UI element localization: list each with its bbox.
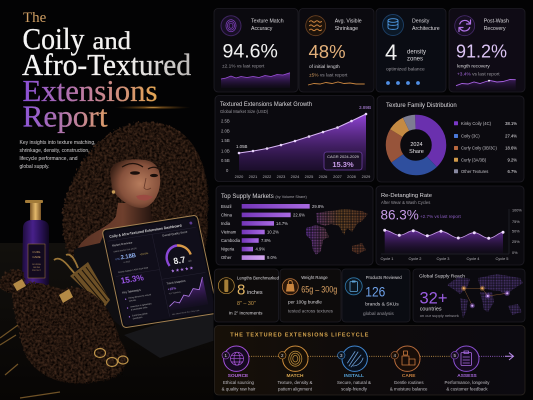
panel: weight range bbox=[280, 269, 341, 322]
panel: re-detangling rate bbox=[376, 186, 524, 265]
step 1: source: Ethical sourcing bbox=[223, 380, 255, 385]
hair bundles bbox=[0, 270, 127, 383]
step 5: assess: ASSESS bbox=[457, 373, 478, 379]
tablet: Coily & Afro-Textured Extensions Dashboard bbox=[109, 224, 182, 239]
tablet: 8.7 bbox=[172, 254, 187, 266]
supply bars: 14.7% bbox=[276, 221, 288, 226]
tablet: distribution bbox=[133, 316, 143, 320]
dotted timeline bbox=[249, 355, 510, 357]
donut legend bbox=[454, 121, 517, 174]
panel: market growth chart: Global Market Size (USD) bbox=[220, 109, 269, 114]
panel: lengths benchmarked bbox=[214, 269, 280, 322]
panel: top supply markets bbox=[216, 186, 373, 265]
CAGR callout: CAGR 2024-2029 bbox=[327, 154, 360, 159]
panel: market growth chart: 1.05B bbox=[236, 144, 248, 149]
panel: global supply reach: on our supply network bbox=[420, 313, 459, 318]
step 3: install: INSTALL bbox=[344, 373, 364, 379]
panel: global supply reach: countries bbox=[420, 306, 442, 312]
intro paragraph: shrinkage, density, construction, bbox=[20, 148, 90, 154]
icon: waves bbox=[306, 16, 326, 36]
supply bars: Cambodia bbox=[221, 238, 241, 243]
cycle labels: Cycle 3 bbox=[437, 256, 449, 261]
intro paragraph bbox=[20, 140, 96, 170]
panel: texture family distribution bbox=[377, 96, 524, 182]
axis labels bbox=[512, 208, 522, 255]
panel: weight range: 65g – 300g bbox=[301, 285, 337, 295]
supply bars: 7.8% bbox=[261, 238, 271, 243]
panel: global supply reach bbox=[413, 269, 525, 322]
panel: density architecture: Architecture bbox=[412, 26, 440, 32]
x axis years: 2029 bbox=[362, 174, 370, 179]
panel: products reviewed bbox=[342, 269, 410, 322]
sparkline bbox=[221, 73, 290, 88]
purple shampoo bottle: PROTECT bbox=[32, 270, 42, 272]
panel: weight range: tested across textures bbox=[288, 308, 334, 313]
keyboard bbox=[124, 314, 214, 358]
step 4: care: & moisture balance bbox=[390, 386, 428, 392]
purple shampoo bottle bbox=[22, 200, 49, 285]
cycle labels bbox=[381, 256, 508, 261]
panel: density architecture: density bbox=[407, 50, 426, 56]
panel: global supply reach: Global Supply Reach bbox=[419, 274, 465, 280]
gold hair rings bbox=[94, 348, 128, 366]
icon: fingerprint bbox=[221, 16, 241, 36]
x axis years bbox=[235, 174, 370, 179]
panel: market growth chart: 3.89B bbox=[359, 105, 371, 110]
donut centre label: Share bbox=[409, 149, 424, 155]
cycle labels: Cycle 4 bbox=[467, 256, 480, 261]
woman's hair bbox=[63, 122, 209, 275]
title: Coily bbox=[22, 22, 85, 56]
panel: re-detangling rate: 86.3% bbox=[380, 208, 419, 223]
supply bars: 4.9% bbox=[256, 246, 265, 252]
panel: re-detangling rate: After Wear & Wash Cycles bbox=[381, 200, 430, 205]
cycle labels: Cycle 1 bbox=[381, 256, 393, 261]
title: Afro-Textured bbox=[22, 48, 191, 82]
panel: products reviewed: brands & SKUs bbox=[365, 302, 399, 308]
donut legend: Curly Coily (3B/3C) bbox=[461, 146, 497, 150]
panel: weight range: Weight Range bbox=[301, 275, 328, 280]
tablet: Key Takeaways bbox=[122, 288, 142, 295]
density dots bbox=[386, 81, 420, 85]
step 5: assess: 5 bbox=[453, 353, 456, 358]
tablet: +18% bbox=[167, 286, 177, 291]
panel: post-wash recovery bbox=[449, 8, 525, 92]
x axis years: 2022 bbox=[263, 174, 271, 179]
title bbox=[22, 10, 191, 134]
supply bars: Other bbox=[221, 255, 232, 260]
panel: visible shrinkage: ±5% vs last report bbox=[309, 73, 348, 79]
panel: visible shrinkage: Avg. Visible bbox=[335, 19, 362, 25]
panel: texture match accuracy: 94.6% bbox=[222, 41, 278, 63]
supply bars: 22.6% bbox=[293, 212, 305, 217]
step 2: match bbox=[278, 346, 313, 392]
donut legend: 38.1% bbox=[505, 121, 517, 126]
panel: density architecture: Density bbox=[412, 19, 430, 25]
gold pick comb bbox=[54, 255, 110, 308]
title: Report bbox=[22, 100, 108, 134]
panel: lengths benchmarked: in 2" increments bbox=[229, 310, 263, 315]
panel: texture family distribution: Texture Family Distribution bbox=[386, 103, 457, 109]
donut legend: Other Textures bbox=[461, 169, 488, 174]
tablet: +10.6% bbox=[139, 251, 149, 256]
x axis years: 2027 bbox=[333, 174, 342, 179]
area and line bbox=[238, 113, 367, 170]
step 3: install: Secure, natural & bbox=[337, 380, 371, 385]
panel: re-detangling rate: +2.7% vs last report bbox=[420, 214, 461, 219]
panel: texture match accuracy: ±2.1% vs last report bbox=[222, 64, 265, 70]
purple shampoo bottle: NOURISH bbox=[32, 264, 41, 266]
donut legend: Curly (3A/3B) bbox=[461, 157, 487, 162]
woman's dress bbox=[74, 236, 125, 330]
donut legend: 9.2% bbox=[507, 157, 517, 162]
step 1: source: & quality raw hair bbox=[222, 386, 256, 392]
panel: post-wash recovery: Post-Wash bbox=[484, 19, 509, 25]
panel: top supply markets: Top Supply Markets (by Volume Share) bbox=[221, 194, 308, 200]
tablet: Growth Outlook CAGR 2024-2029 bbox=[118, 266, 149, 274]
step 1: source: SOURCE bbox=[228, 373, 249, 379]
tablet: Expanding global bbox=[132, 313, 148, 317]
donut legend: Kinky Coily (4C) bbox=[461, 121, 492, 126]
tablet: ★★★★★ bbox=[170, 265, 195, 274]
tablet: Innovation in lightweight bbox=[130, 302, 152, 309]
step 2: match: Texture, density & bbox=[278, 380, 313, 385]
panel: lengths benchmarked: inches bbox=[247, 290, 263, 296]
panel: visible shrinkage: Shrinkage bbox=[335, 26, 358, 32]
supply bars: China bbox=[221, 212, 233, 217]
step 2: match: pattern alignment bbox=[278, 386, 313, 392]
panel: products reviewed: 126 bbox=[365, 285, 385, 300]
donut centre label: 2024 bbox=[410, 142, 423, 148]
y axis labels: 0 bbox=[226, 168, 229, 173]
arrow bbox=[505, 353, 514, 360]
decorative gold glint bbox=[115, 106, 191, 110]
axis labels: 75% bbox=[512, 220, 520, 224]
supply bars: India bbox=[221, 221, 231, 226]
x axis years: 2020 bbox=[235, 174, 244, 179]
tablet: 15.3% bbox=[120, 272, 145, 286]
axis labels: 50% bbox=[512, 230, 520, 234]
step 1: source: 1 bbox=[224, 353, 227, 358]
tablet: Trend Snapshot bbox=[166, 279, 186, 286]
panel: lifecycle: THE TEXTURED EXTENSIONS LIFECYCLE bbox=[230, 332, 369, 338]
y axis labels: 2.0B bbox=[221, 128, 230, 134]
panel: visible shrinkage: 48% bbox=[308, 41, 346, 62]
network lines and hubs bbox=[461, 286, 510, 308]
supply bars: 29.8% bbox=[312, 204, 324, 209]
supply bars: Vietnam bbox=[221, 229, 237, 234]
panel: market growth chart: Textured Extensions Market Growth bbox=[220, 102, 312, 108]
tablet: textures bbox=[129, 299, 136, 303]
supply bars: 9.0% bbox=[267, 255, 277, 260]
supply bars: 10.2% bbox=[267, 229, 279, 234]
panel: density architecture: zones bbox=[407, 57, 423, 63]
intro paragraph: lifecycle performance, and bbox=[20, 156, 78, 162]
world map bbox=[447, 274, 523, 318]
step 5: assess: Performance, longevity bbox=[445, 380, 490, 385]
step 1: source bbox=[222, 346, 256, 392]
step 5: assess: & customer feedback bbox=[446, 386, 488, 392]
tablet: Global Market Size (2024) bbox=[113, 247, 137, 253]
axis labels: 25% bbox=[512, 240, 520, 244]
panel: market growth chart bbox=[215, 96, 374, 182]
step 4: care: CARE bbox=[402, 373, 416, 379]
panel: post-wash recovery: +3.4% vs last report bbox=[457, 72, 500, 78]
purple shampoo bottle: CARE bbox=[32, 255, 41, 259]
panel: texture match accuracy: Accuracy bbox=[251, 26, 273, 32]
panel: texture match accuracy bbox=[214, 8, 298, 92]
panel: products reviewed: global analysis bbox=[363, 311, 394, 316]
title: Extensions bbox=[22, 74, 158, 108]
step 3: install: scalp-friendly bbox=[341, 386, 368, 392]
gold edge of notebook bbox=[0, 325, 60, 398]
cycle labels: Cycle 5 bbox=[496, 256, 508, 261]
purple shampoo bottle: DEFINE bbox=[33, 267, 41, 269]
tablet: YoY Searches bbox=[168, 291, 181, 295]
tablet: USD bbox=[115, 256, 121, 261]
y axis labels: 1.0B bbox=[221, 148, 230, 154]
world map bbox=[306, 209, 368, 255]
x axis years: 2026 bbox=[319, 174, 327, 179]
intro paragraph: global supply. bbox=[20, 164, 50, 170]
sparkline bbox=[456, 80, 516, 90]
woman's face bbox=[110, 159, 160, 208]
x axis years: 2028 bbox=[347, 174, 356, 179]
CAGR callout: 15.3% bbox=[332, 160, 354, 169]
panel: visible shrinkage bbox=[299, 8, 374, 92]
panel: lengths benchmarked: 8" – 30" bbox=[237, 301, 256, 307]
x axis years: 2024 bbox=[291, 174, 300, 179]
donut legend: 18.6% bbox=[505, 146, 517, 150]
panel: lifecycle bbox=[214, 326, 525, 395]
panel: texture match accuracy: Texture Match bbox=[251, 19, 284, 25]
step 4: care: 4 bbox=[393, 353, 396, 358]
tablet: Overall Quality Score bbox=[162, 230, 188, 238]
panel: re-detangling rate: Re-Detangling Rate bbox=[381, 193, 432, 199]
panel: lengths benchmarked: 8 bbox=[237, 282, 245, 298]
title: and bbox=[92, 28, 132, 55]
supply bars bbox=[221, 204, 324, 260]
icon: weight bbox=[282, 279, 298, 295]
x axis years: 2021 bbox=[249, 174, 257, 179]
cycle labels: Cycle 2 bbox=[409, 256, 421, 261]
donut centre label bbox=[409, 142, 424, 155]
panel: post-wash recovery: Recovery bbox=[484, 26, 506, 32]
step 3: install: 3 bbox=[340, 353, 343, 358]
y axis labels: 2.5B bbox=[221, 118, 230, 124]
intro paragraph: Key insights into texture matching, bbox=[20, 140, 96, 146]
step 2: match: 2 bbox=[281, 353, 284, 358]
step 4: care: Gentle routines bbox=[394, 380, 424, 385]
tablet: Market Overview bbox=[112, 240, 133, 248]
title: The bbox=[23, 10, 47, 26]
panel: density architecture: 4 bbox=[385, 40, 397, 65]
axis labels: 0% bbox=[512, 251, 518, 255]
rate line chart bbox=[383, 229, 504, 254]
panel: lengths benchmarked: Lengths Benchmarked bbox=[237, 275, 280, 280]
step 5: assess bbox=[445, 346, 490, 392]
hero photo: woman, tablet and hair products bbox=[0, 122, 218, 400]
donut legend: Coily (3C) bbox=[461, 134, 480, 138]
icon: recovery arrows bbox=[455, 16, 475, 36]
CAGR callout bbox=[324, 152, 362, 170]
supply bars: Nigeria bbox=[221, 246, 235, 252]
y axis labels bbox=[221, 118, 230, 173]
purple shampoo bottle: CURL bbox=[32, 250, 41, 254]
icon: clipboard bbox=[345, 278, 362, 295]
donut legend: 6.7% bbox=[507, 169, 517, 174]
tablet: in 2023 bbox=[124, 261, 130, 264]
panel: weight range: per 100g bundle bbox=[288, 299, 322, 304]
panel: density architecture: optimized balance bbox=[386, 67, 425, 73]
tablet: Rising demand for natural bbox=[128, 293, 152, 300]
tablet bbox=[102, 215, 218, 328]
tablet: 2.18B bbox=[120, 253, 137, 261]
icon: hair length tag bbox=[218, 278, 234, 294]
icon: layered discs bbox=[382, 14, 404, 36]
step 2: match: MATCH bbox=[287, 373, 304, 379]
x axis years: 2023 bbox=[277, 174, 285, 179]
tablet: /10 bbox=[188, 260, 192, 263]
donut chart bbox=[393, 122, 439, 168]
tablet: Mon Month Month Ext. Prog. Date bbox=[172, 309, 200, 316]
panel: density architecture bbox=[376, 8, 446, 92]
panel: visible shrinkage: of initial length bbox=[309, 64, 340, 70]
supply bars: Brazil bbox=[221, 204, 232, 209]
sparkline bbox=[308, 82, 365, 85]
y axis labels: 0.5B bbox=[221, 158, 230, 163]
step 3: install bbox=[337, 346, 371, 392]
woman's neck and shoulders bbox=[78, 203, 153, 248]
donut legend: 27.4% bbox=[505, 134, 517, 138]
panel: post-wash recovery: 91.2% bbox=[456, 42, 507, 62]
table surface bbox=[0, 243, 211, 342]
panel: global supply reach: 32+ bbox=[420, 289, 448, 307]
step 4: care bbox=[390, 346, 428, 392]
panel: products reviewed: Products Reviewed bbox=[366, 275, 402, 280]
axis labels: 100% bbox=[512, 208, 522, 212]
tablet: & breathable wefts bbox=[131, 306, 148, 312]
panel: post-wash recovery: length recovery bbox=[457, 64, 490, 70]
y axis labels: 1.5B bbox=[221, 138, 230, 143]
x axis years: 2025 bbox=[305, 174, 313, 179]
